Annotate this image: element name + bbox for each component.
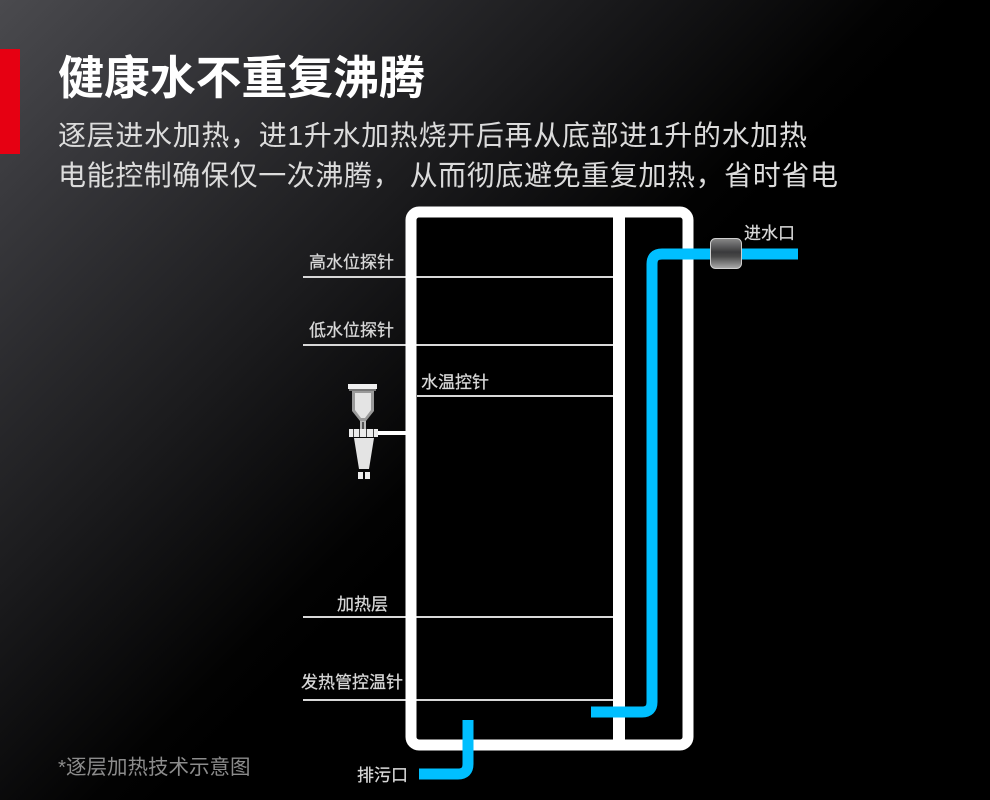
title: 健康水不重复沸腾 xyxy=(58,52,425,104)
tank partition xyxy=(613,212,625,745)
icon: temperature valve xyxy=(348,384,407,479)
diagram labels: 加热层 xyxy=(337,595,388,614)
drain pipe xyxy=(419,720,468,774)
inlet valve xyxy=(710,238,742,268)
diagram labels: 排污口 xyxy=(357,766,408,785)
subtitle text: 逐层进水加热，进1升水加热烧开后再从底部进1升的水加热 xyxy=(58,120,807,151)
red accent bar xyxy=(0,49,20,154)
black tank interior xyxy=(411,212,688,745)
diagram labels: 发热管控温针 xyxy=(301,673,403,692)
diagram labels xyxy=(301,224,795,785)
panel: water tank diagram xyxy=(301,212,798,785)
tank outline xyxy=(411,212,688,745)
subtitle text: 电能控制确保仅一次沸腾， 从而彻底避免重复加热，省时省电 xyxy=(58,160,838,191)
footnote: *逐层加热技术示意图 xyxy=(58,756,250,779)
probe lines xyxy=(303,277,613,700)
diagram labels: 水温控针 xyxy=(421,373,489,392)
diagram labels: 高水位探针 xyxy=(309,253,394,272)
diagram labels: 低水位探针 xyxy=(309,321,394,340)
subtitle text xyxy=(58,120,838,191)
diagram labels: 进水口 xyxy=(744,224,795,243)
inlet pipe xyxy=(591,254,798,712)
